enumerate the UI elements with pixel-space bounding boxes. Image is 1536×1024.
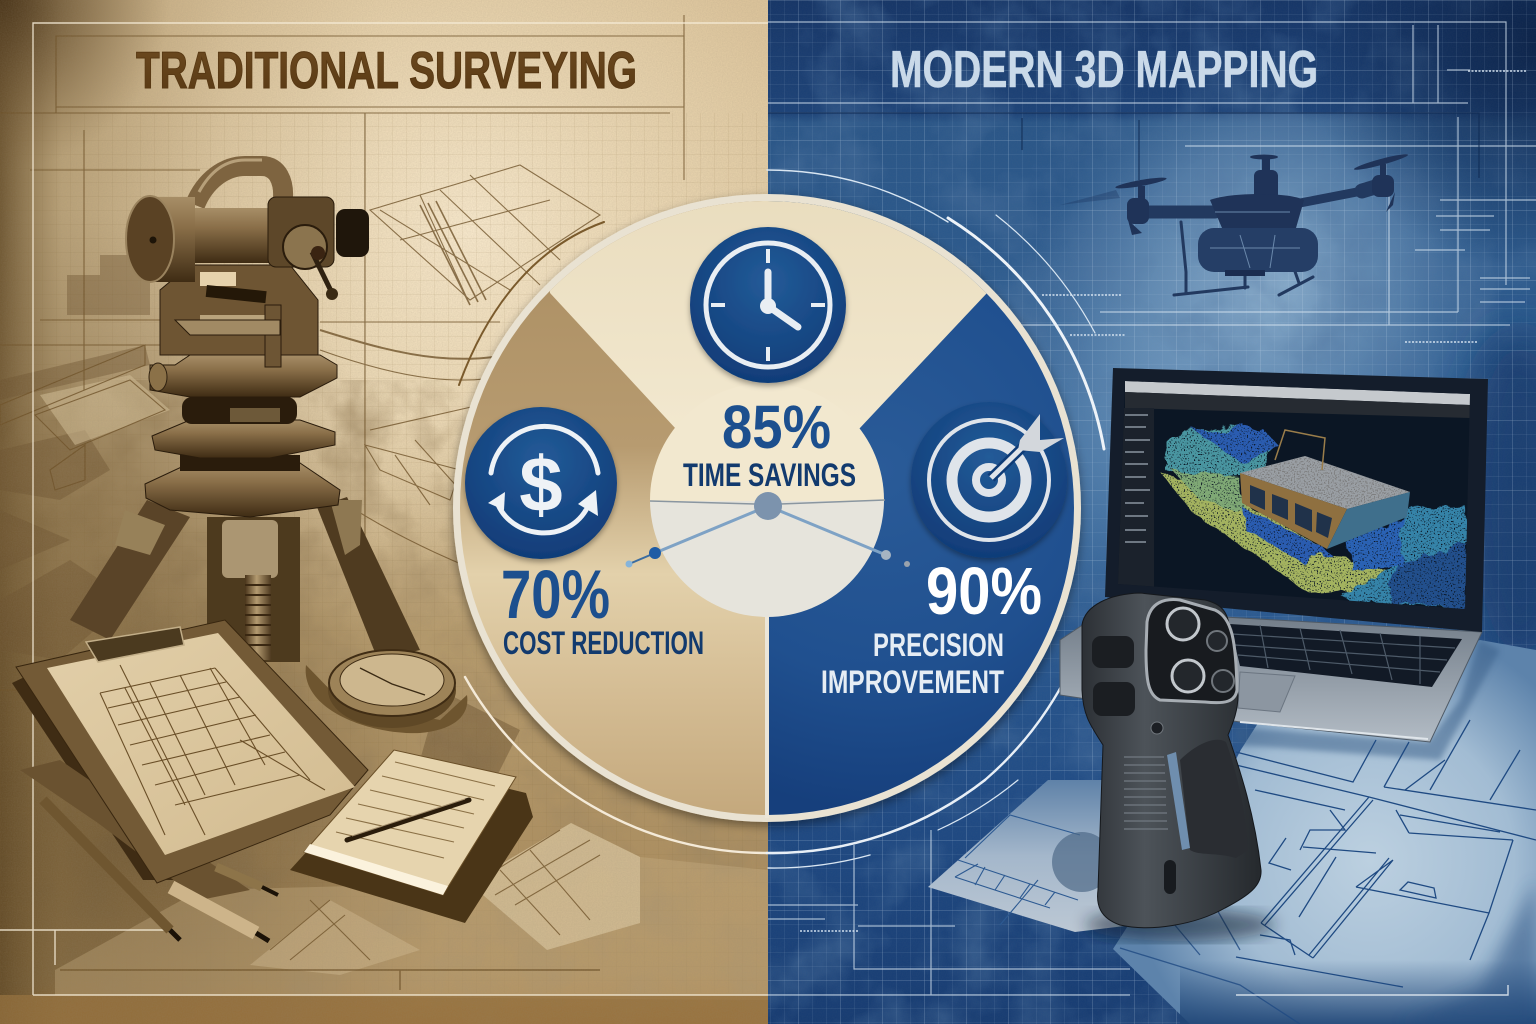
drone <box>1060 152 1409 295</box>
clipboard with map <box>16 620 368 883</box>
title: modern 3D mapping: MODERN 3D MAPPING <box>890 41 1318 99</box>
segment: precision background <box>767 190 1092 830</box>
point cloud <box>1160 424 1468 612</box>
stat: precision improvement <box>821 554 1042 700</box>
telescope tube <box>195 208 275 263</box>
lower plate <box>145 463 340 517</box>
stat: cost reduction <box>501 556 704 661</box>
clipboard clip <box>86 627 184 662</box>
laptop lid <box>1105 368 1488 632</box>
stat: precision improvement: PRECISION <box>873 627 1004 663</box>
theodolite on tripod <box>70 160 420 662</box>
compass <box>306 650 467 733</box>
stat: time savings: 85% <box>722 393 831 461</box>
title: traditional surveying: TRADITIONAL SURVEYING <box>136 42 637 100</box>
levelling ring <box>182 397 297 424</box>
alidade body <box>160 265 318 355</box>
scanned building <box>1240 430 1410 549</box>
laptop base <box>1060 610 1482 742</box>
blueprint paper: left sheet <box>928 780 1133 932</box>
hub upper <box>650 428 884 501</box>
notebook and pen <box>290 750 533 923</box>
eyepiece <box>336 209 369 257</box>
laptop <box>1060 368 1488 742</box>
stat: time savings: TIME SAVINGS <box>683 457 856 493</box>
wheel divider <box>765 610 769 818</box>
icon: target with arrow <box>911 402 1067 558</box>
carrying handle <box>195 166 283 205</box>
hub lower <box>650 501 884 617</box>
blueprint paper: right sheet <box>1113 640 1536 1024</box>
stat: time savings <box>683 393 856 493</box>
icon: dollar cycle: $ <box>519 440 563 528</box>
segment: time savings background <box>550 201 986 428</box>
tripod legs <box>70 497 420 662</box>
wheel rim <box>453 194 1081 822</box>
panel: traditional surveying background <box>0 0 768 1024</box>
drone prop blur <box>1060 190 1120 205</box>
objective barrel <box>150 197 195 282</box>
panel: modern 3D mapping background <box>768 0 1536 1024</box>
stat: cost reduction: 70% <box>501 556 610 633</box>
comparison wheel <box>450 180 1092 830</box>
lever <box>312 252 332 293</box>
decorative white frame <box>0 23 768 995</box>
paper stack under clipboard <box>12 660 250 900</box>
upper plate <box>152 420 335 458</box>
icon: clock <box>690 227 846 383</box>
segment: cost reduction background <box>450 190 767 830</box>
pencils <box>43 800 278 941</box>
scanner grip <box>1180 740 1248 858</box>
alidade base <box>150 355 337 397</box>
connector lines <box>626 492 910 568</box>
stat: cost reduction: COST REDUCTION <box>503 625 704 661</box>
stat: precision improvement: 90% <box>926 554 1042 629</box>
handheld 3D scanner <box>1082 593 1275 941</box>
stat: precision improvement: IMPROVEMENT <box>821 664 1004 700</box>
outer arcs around the comparison wheel <box>459 170 1104 868</box>
icon: dollar cycle <box>465 407 617 559</box>
